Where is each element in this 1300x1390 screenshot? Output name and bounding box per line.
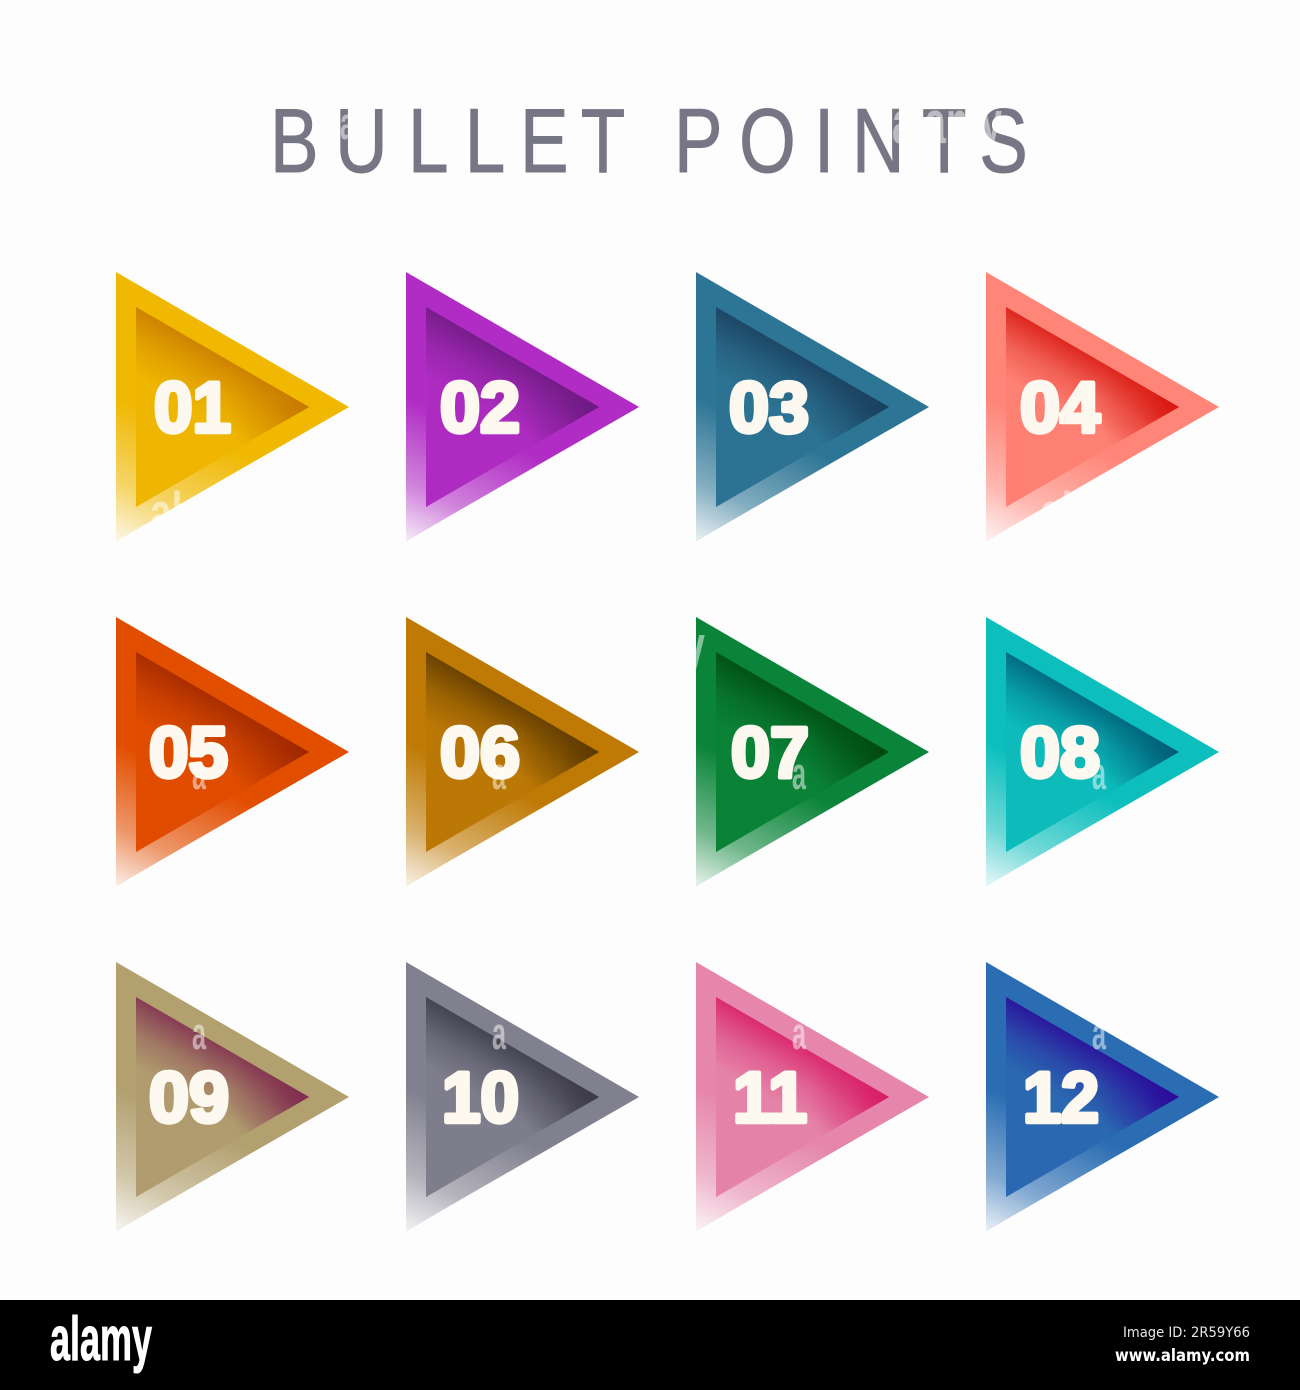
watermarks: alamy (892, 89, 1002, 156)
bullet 02: 02 (440, 369, 520, 448)
bullet 08: 08 (1020, 714, 1100, 793)
bullet 02 (406, 272, 639, 541)
bullet 07 (696, 617, 929, 886)
bullet 11 (696, 962, 929, 1231)
bullet 10 (406, 962, 639, 1231)
bullet 11: 11 (733, 1059, 807, 1138)
watermarks: alamy (150, 481, 260, 546)
watermarks: a (1092, 748, 1107, 799)
bullet 04 (986, 272, 1219, 541)
bullet 10: 10 (442, 1059, 519, 1138)
bullet 03: 03 (729, 369, 809, 448)
watermarks: a (492, 1008, 507, 1059)
footer bar (0, 1300, 1300, 1390)
bullet 01 (116, 272, 349, 541)
bullet 03 (696, 272, 929, 541)
bullet 12: 12 (1023, 1059, 1099, 1138)
bullet 01: 01 (154, 369, 231, 448)
website: www.alamy.com (1115, 1346, 1250, 1366)
bullet 05: 05 (149, 714, 228, 793)
bullet 06 (406, 617, 639, 886)
watermarks: alamy (1040, 481, 1150, 546)
footer logo: alamy (50, 1305, 152, 1374)
watermarks: a (192, 748, 207, 799)
watermarks: a (792, 748, 807, 799)
watermarks: a (792, 1008, 807, 1059)
watermarks (150, 89, 1150, 1059)
image id: Image ID: 2R59Y66 (1123, 1325, 1250, 1341)
watermarks: a (1092, 1008, 1107, 1059)
bullet 09: 09 (149, 1059, 229, 1138)
title: BULLET POINTS (270, 90, 1028, 192)
bullet 08 (986, 617, 1219, 886)
watermarks: a (340, 98, 355, 149)
bullet 04: 04 (1020, 369, 1101, 448)
bullet 12 (986, 962, 1219, 1231)
bullet 06: 06 (440, 714, 520, 793)
watermarks: alamy (595, 614, 705, 679)
watermarks: a (192, 1008, 207, 1059)
bullet 07: 07 (731, 714, 809, 793)
bullet 05 (116, 617, 349, 886)
watermarks: a (492, 748, 507, 799)
bullet 09 (116, 962, 349, 1231)
